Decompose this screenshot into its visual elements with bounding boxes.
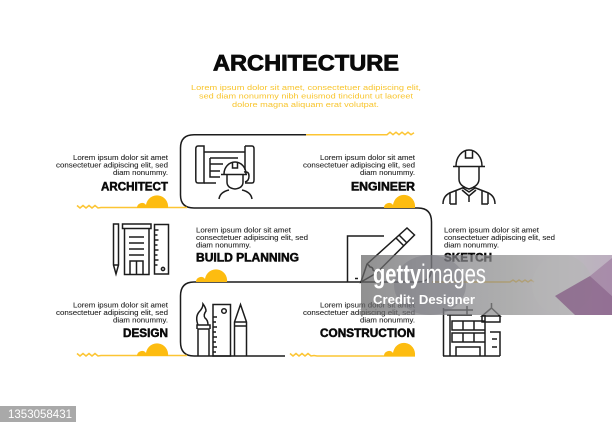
design description: diam nonummy. (113, 315, 168, 324)
engineer description: diam nonummy. (360, 168, 415, 177)
intro text: sed diam nonummy nibh euismod tincidunt ut laoreet (199, 92, 414, 101)
construction heading: CONSTRUCTION (320, 327, 415, 340)
panel: sketch (348, 226, 555, 282)
icon: blueprint and architect (196, 146, 254, 199)
icon: engineer in hard hat (443, 150, 495, 204)
panel: construction (303, 300, 500, 356)
icon: building with crane (443, 303, 500, 356)
construction description: diam nonummy. (360, 315, 415, 324)
construction description: consectetuer adipiscing elit, sed (303, 308, 415, 317)
engineer hump decoration (384, 195, 415, 208)
sketch wavy connector (432, 280, 534, 282)
sketch description: Lorem ipsum dolor sit amet (444, 226, 539, 234)
design description (56, 300, 168, 324)
sketch description: diam nonummy. (444, 240, 499, 250)
panel: architect (56, 146, 254, 208)
architect description: Lorem ipsum dolor sit amet (73, 153, 168, 162)
build planning hump decoration (196, 269, 227, 282)
serpentine timeline path (77, 132, 432, 356)
intro text: Lorem ipsum dolor sit amet, consectetuer adipiscing elit, (191, 83, 421, 92)
watermark credit text: Credit: Designer (373, 292, 475, 307)
sketch description: consectetuer adipiscing elit, sed (444, 233, 555, 242)
icon: pencil drawing on frame (348, 228, 414, 282)
build planning description: diam nonummy. (196, 240, 251, 250)
design description: consectetuer adipiscing elit, sed (56, 308, 168, 317)
panel: build planning (114, 224, 308, 282)
build planning description (196, 226, 308, 250)
watermark logo text: gettyimages (373, 259, 486, 289)
sketch description (444, 226, 555, 250)
architect hump decoration (137, 195, 168, 208)
construction description (303, 300, 415, 324)
intro text: dolore magna aliquam erat volutpat. (232, 100, 379, 109)
image id tag (0, 406, 76, 422)
icon: brush ruler and pen (197, 304, 246, 356)
architect description (56, 153, 168, 177)
watermark: getty images banner (361, 255, 612, 315)
design heading: DESIGN (123, 327, 168, 340)
construction description: Lorem ipsum dolor sit amet (320, 300, 415, 309)
construction hump decoration (384, 343, 415, 356)
architect heading: ARCHITECT (101, 181, 168, 194)
build planning description: consectetuer adipiscing elit, sed (196, 233, 308, 242)
engineer description: Lorem ipsum dolor sit amet (320, 153, 415, 162)
panel: engineer (303, 150, 495, 208)
design hump decoration (137, 343, 168, 356)
design description: Lorem ipsum dolor sit amet (73, 300, 168, 309)
build planning description: Lorem ipsum dolor sit amet (196, 226, 291, 234)
sketch heading: SKETCH (444, 252, 492, 265)
icon: pencil building and ruler (114, 224, 168, 274)
architect description: diam nonummy. (113, 168, 168, 177)
panel: design (56, 300, 246, 356)
image id tag: 1353058431 (8, 409, 72, 421)
engineer description (303, 153, 415, 177)
intro text (191, 83, 421, 109)
architect description: consectetuer adipiscing elit, sed (56, 161, 168, 170)
engineer heading: ENGINEER (351, 181, 416, 194)
engineer description: consectetuer adipiscing elit, sed (303, 161, 415, 170)
build planning heading: BUILD PLANNING (196, 252, 299, 265)
title: ARCHITECTURE (213, 50, 399, 76)
